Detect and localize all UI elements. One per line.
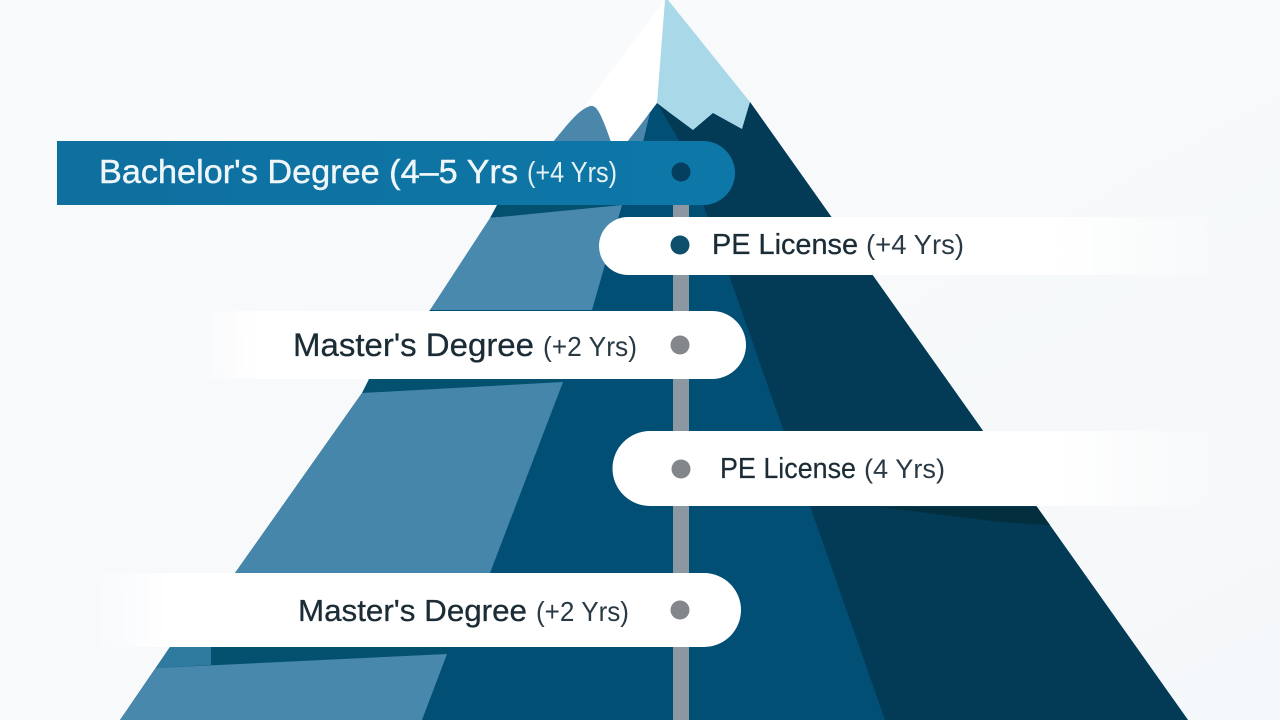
- middle shadow band: [362, 379, 563, 393]
- middle light facet: [235, 382, 563, 573]
- lower shadow band: [156, 647, 447, 668]
- mountain base mid-blue face: [120, 102, 1188, 720]
- milestone: Master's Degree lower: (+2 Yrs): [536, 596, 629, 627]
- snow: white left face: [585, 0, 665, 142]
- milestone: PE License lower: (4 Yrs): [864, 454, 945, 484]
- milestone: Master's Degree upper: (+2 Yrs): [543, 331, 637, 362]
- milestone: PE License upper: PE License: [712, 229, 858, 261]
- milestone: Master's Degree upper: [195, 311, 746, 379]
- milestone: PE License lower: PE License: [720, 453, 856, 485]
- milestone: PE License lower: [612, 431, 1225, 506]
- milestone: Master's Degree lower: [90, 573, 741, 647]
- snow cap: [657, 0, 750, 130]
- upper shadow band: [490, 205, 622, 218]
- timeline spine: [673, 200, 689, 720]
- milestone: Bachelor's Degree: (+4 Yrs): [527, 157, 617, 189]
- milestone: Bachelor's Degree: [57, 141, 735, 205]
- shadow under PE bar: [880, 507, 1050, 525]
- milestone: PE License upper: [599, 217, 1225, 275]
- milestone: Bachelor's Degree: Bachelor's Degree (4–5 Yrs: [99, 153, 518, 190]
- second small peak highlight: [627, 113, 650, 142]
- lower light facet: [120, 654, 447, 720]
- small blue peak: [553, 106, 611, 142]
- milestone: Master's Degree upper: Master's Degree: [293, 327, 534, 363]
- milestone: PE License upper: (+4 Yrs): [866, 229, 964, 260]
- milestone: Master's Degree lower: Master's Degree: [298, 593, 527, 628]
- upper light facet: [430, 205, 622, 310]
- mountain dark right face: [657, 102, 1188, 720]
- lower teal sliver: [156, 647, 211, 668]
